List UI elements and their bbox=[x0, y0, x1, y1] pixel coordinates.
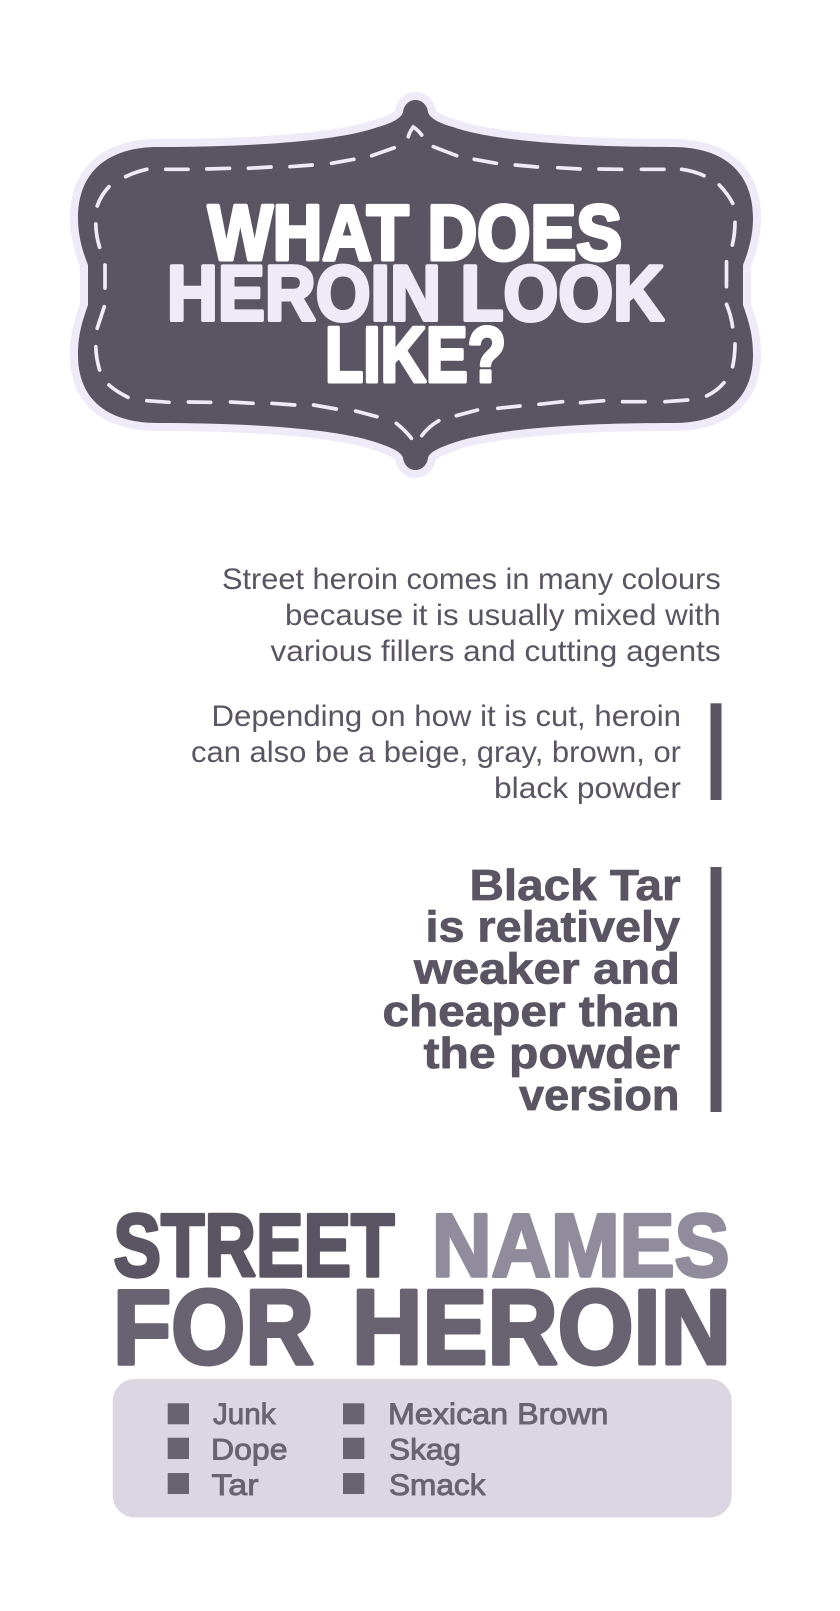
badge shape with light outline bbox=[78, 100, 753, 470]
panel background bbox=[113, 1379, 732, 1518]
accent bar: black tar block bbox=[710, 867, 722, 1112]
stitched dashed border bbox=[96, 127, 735, 438]
title text: LIKE? bbox=[325, 310, 506, 398]
title text: WHAT DOES bbox=[208, 188, 622, 276]
text block: black tar: is relatively bbox=[426, 902, 681, 952]
street name labels: Dope bbox=[211, 1433, 288, 1466]
street name labels: Junk bbox=[213, 1398, 276, 1431]
text block: street heroin colours bbox=[222, 563, 721, 668]
title text bbox=[167, 188, 664, 398]
street name labels: Smack bbox=[389, 1469, 487, 1502]
text block: black tar: the powder bbox=[424, 1029, 680, 1078]
text block: black tar: cheaper than bbox=[382, 987, 680, 1036]
text block: depending on how it is cut: can also be a beige, gray, brown, or bbox=[191, 736, 681, 769]
heading: street names for heroin: FOR bbox=[113, 1269, 314, 1387]
panel: street names list bbox=[113, 1379, 732, 1518]
text block: depending on how it is cut bbox=[191, 700, 681, 805]
street name labels: Skag bbox=[389, 1433, 461, 1466]
text block: street heroin colours: because it is usually mixed with bbox=[285, 599, 721, 632]
panel: title badge bbox=[78, 100, 753, 470]
bullet squares bbox=[168, 1403, 364, 1494]
street name labels: Mexican Brown bbox=[388, 1398, 608, 1431]
street name labels bbox=[211, 1398, 608, 1502]
text block: black tar: weaker and bbox=[413, 944, 680, 994]
text block: black tar: version bbox=[519, 1071, 680, 1120]
text block: street heroin colours: Street heroin comes in many colours bbox=[222, 563, 721, 596]
heading: street names for heroin bbox=[113, 1195, 731, 1387]
text block: black tar bbox=[382, 861, 681, 1120]
text block: black tar: Black Tar bbox=[470, 861, 680, 910]
heading: street names for heroin: HEROIN bbox=[352, 1269, 731, 1387]
text block: street heroin colours: various fillers and cutting agents bbox=[270, 635, 721, 668]
text block: depending on how it is cut: black powder bbox=[494, 772, 681, 805]
heading: street names for heroin: STREET bbox=[114, 1195, 394, 1295]
heading: street names for heroin: NAMES bbox=[432, 1195, 730, 1295]
text block: depending on how it is cut: Depending on how it is cut, heroin bbox=[212, 700, 681, 733]
accent bar: depending block bbox=[710, 703, 722, 800]
street name labels: Tar bbox=[212, 1469, 258, 1502]
title text: HEROIN LOOK bbox=[167, 249, 664, 337]
